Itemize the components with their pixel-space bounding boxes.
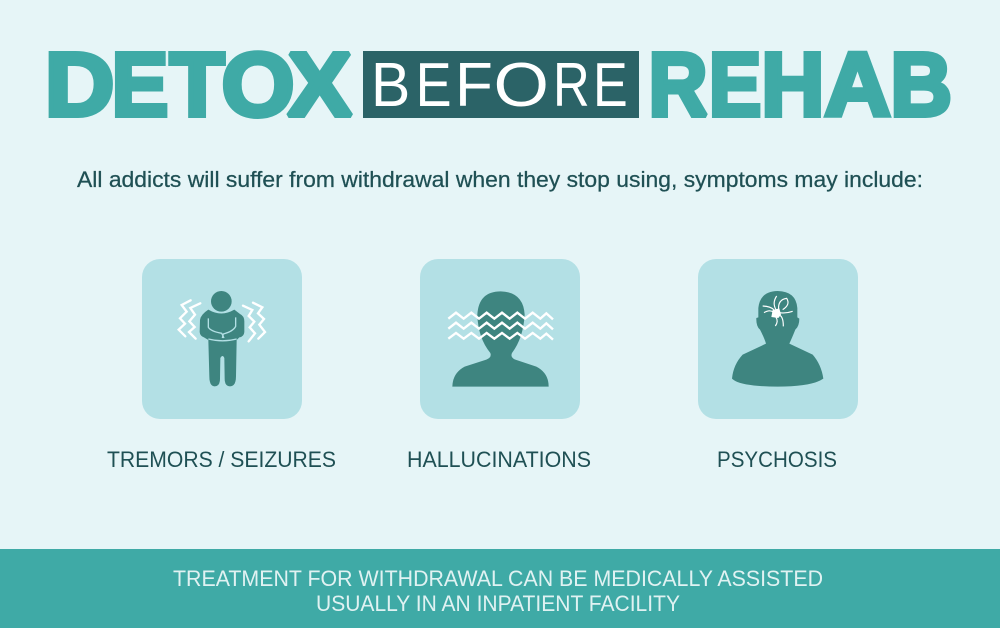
icon: head with waves	[448, 291, 553, 387]
title word box: BEFORE: F	[455, 51, 493, 120]
title word: DETOX	[45, 34, 352, 136]
icon tile	[698, 259, 858, 419]
panel: tremors / seizures	[107, 259, 336, 472]
title word box: BEFORE: B	[371, 50, 410, 119]
title	[45, 34, 952, 136]
title word: REHAB: B	[890, 34, 952, 135]
title word: REHAB: E	[709, 35, 761, 135]
title word: DETOX: E	[112, 34, 168, 135]
subtitle: All addicts will suffer from withdrawal when they stop using, symptoms may include:	[77, 167, 923, 192]
title word box: BEFORE: O	[494, 51, 549, 120]
title word: REHAB	[648, 34, 952, 135]
title word: DETOX: X	[288, 34, 352, 135]
icon: shaking person	[179, 291, 265, 386]
icon tile	[142, 259, 302, 419]
footer banner	[0, 549, 1000, 628]
title word: DETOX: D	[45, 34, 114, 135]
footer text line 2: USUALLY IN AN INPATIENT FACILITY	[316, 591, 680, 616]
footer text line 1: TREATMENT FOR WITHDRAWAL CAN BE MEDICALLY ASSISTED	[173, 566, 823, 591]
title word box: BEFORE: E	[416, 51, 452, 120]
label: HALLUCINATIONS	[407, 447, 591, 472]
title word: REHAB: H	[761, 34, 824, 135]
panel: hallucinations	[407, 259, 591, 472]
icon: head with spider	[732, 291, 823, 387]
title word box: BEFORE: E	[593, 51, 628, 120]
title word: DETOX: O	[222, 35, 294, 135]
title word: DETOX: T	[170, 35, 224, 136]
title word box: BEFORE	[363, 50, 639, 120]
label: PSYCHOSIS	[717, 447, 837, 472]
title word: REHAB: A	[824, 35, 891, 135]
title word: REHAB: R	[648, 35, 708, 135]
icon tile	[420, 259, 580, 419]
title word box: BEFORE: R	[553, 51, 590, 120]
panel: psychosis	[698, 259, 858, 472]
label: TREMORS / SEIZURES	[107, 447, 336, 472]
